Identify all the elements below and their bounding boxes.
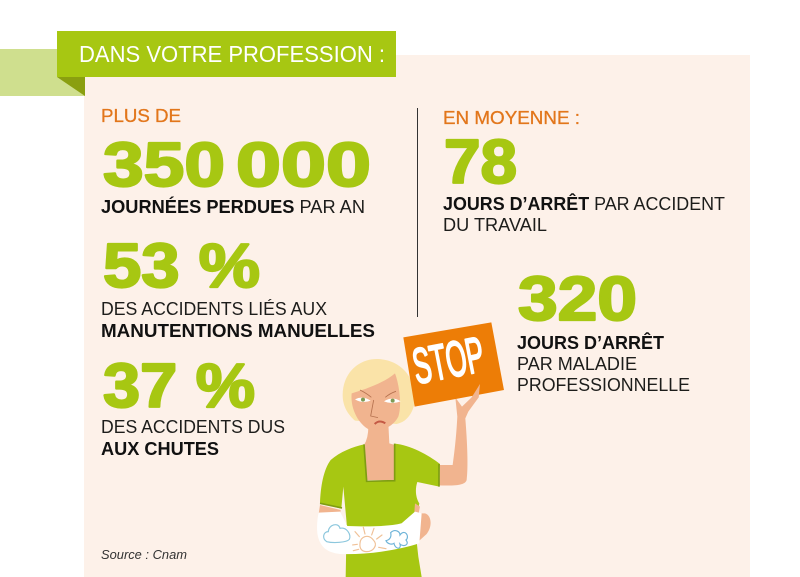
stop sign: STOP xyxy=(408,326,489,395)
hand under cast xyxy=(413,503,431,541)
stat: 37 %: DES ACCIDENTS DUS xyxy=(101,416,285,437)
stat: 320 jours: 320 xyxy=(518,265,637,334)
arm cast xyxy=(317,512,422,554)
stat: 320 jours: PROFESSIONNELLE xyxy=(517,374,690,395)
stop sign xyxy=(403,322,504,407)
panel: background xyxy=(84,55,750,577)
stat: 53 %: DES ACCIDENTS LIÉS AUX xyxy=(101,298,327,319)
stat: 320 jours: PAR MALADIE xyxy=(517,353,637,374)
stat: 350 000 journées perdues: PLUS DE xyxy=(101,105,181,126)
stat: 350 000 journées perdues xyxy=(101,105,371,217)
stat: 53 %: 53 % xyxy=(103,232,260,301)
stat: 320 jours xyxy=(517,265,690,395)
stat: 78 jours: DU TRAVAIL xyxy=(443,214,547,235)
stat: 37 %: AUX CHUTES xyxy=(101,438,219,459)
stat: 350 000 journées perdues: 000 xyxy=(236,131,371,200)
stat: 37 % xyxy=(101,352,285,459)
illustration: woman with stop sign xyxy=(317,322,504,577)
dress xyxy=(320,444,440,577)
upper left arm xyxy=(319,505,341,514)
stat: 53 % xyxy=(101,232,375,341)
face xyxy=(351,373,400,431)
ribbon: fold xyxy=(57,77,85,96)
stat: 37 %: 37 % xyxy=(103,352,255,421)
brows, nose, mouth xyxy=(360,390,396,424)
raised arm xyxy=(439,384,480,486)
fingers over sign xyxy=(472,384,480,405)
hair back xyxy=(343,359,415,424)
stat: 78 jours: JOURS D’ARRÊT PAR ACCIDENT xyxy=(443,193,725,214)
stat: 320 jours: JOURS D’ARRÊT xyxy=(517,332,665,353)
dress trim xyxy=(320,444,439,508)
stat: 53 %: MANUTENTIONS MANUELLES xyxy=(101,320,375,341)
ribbon: back strip xyxy=(0,49,85,96)
vertical divider xyxy=(417,108,418,317)
heading banner: DANS VOTRE PROFESSION : xyxy=(79,41,385,67)
stat: 78 jours: 78 xyxy=(444,128,517,197)
source: Source : Cnam xyxy=(101,548,187,562)
neck xyxy=(364,423,395,480)
stat: 350 000 journées perdues: JOURNÉES PERDUES PAR AN xyxy=(101,196,365,217)
stat: 78 jours: EN MOYENNE : xyxy=(443,107,580,128)
heading banner xyxy=(57,31,396,77)
stat: 350 000 journées perdues: 350 xyxy=(103,131,225,200)
eyes xyxy=(355,398,401,403)
stat: 78 jours xyxy=(443,107,725,235)
cast drawings xyxy=(324,525,407,552)
